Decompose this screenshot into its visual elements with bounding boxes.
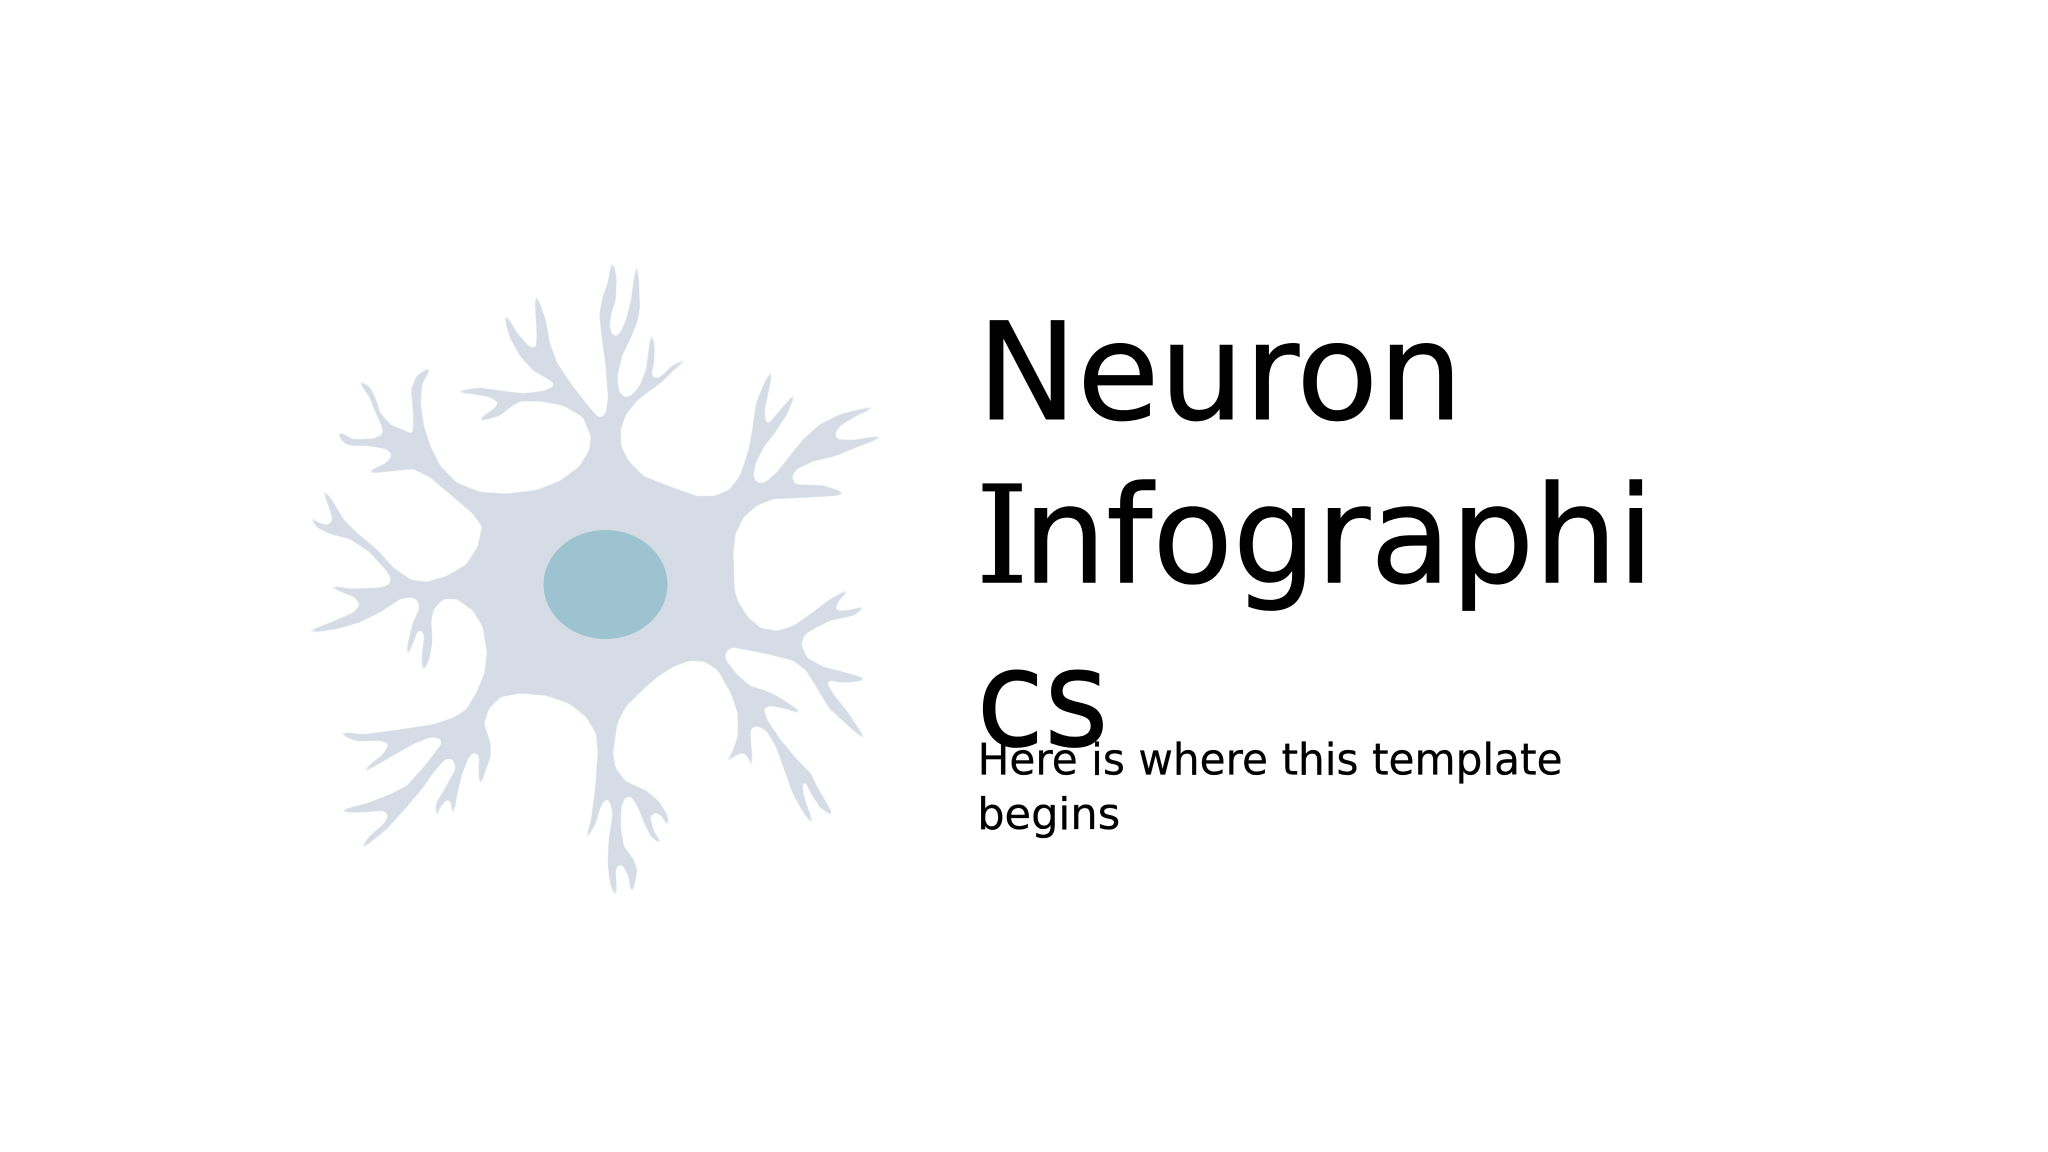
title (976, 294, 1654, 778)
title: cs (976, 620, 1108, 778)
title: Neuron (977, 294, 1463, 451)
subtitle: Here is where this template (978, 734, 1563, 786)
neuron illustration (302, 256, 889, 901)
title: I (976, 457, 1029, 614)
neuron cell body and dendrites (302, 256, 889, 901)
title: nfographi (1023, 457, 1654, 614)
subtitle (977, 734, 1563, 840)
neuron nucleus (544, 530, 668, 639)
subtitle: begins (977, 789, 1120, 840)
